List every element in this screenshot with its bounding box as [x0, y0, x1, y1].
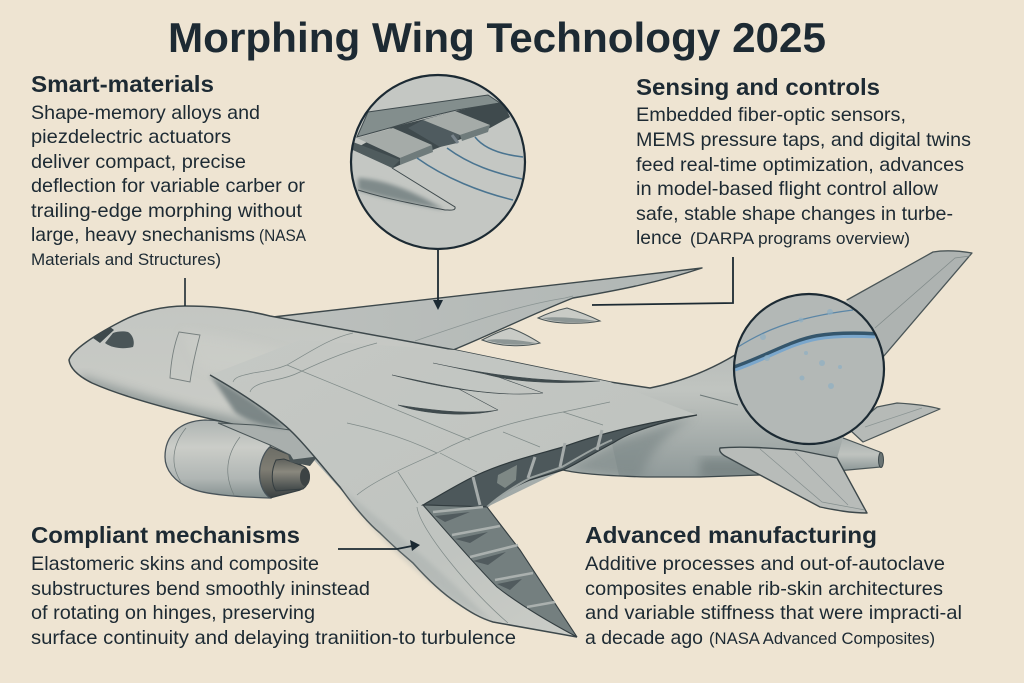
panel: smart materials [31, 71, 307, 269]
text block: compliant mechanisms: of rotating on hinges, preserving [31, 602, 315, 624]
text block: compliant mechanisms: Elastomeric skins and composite [31, 553, 319, 575]
text block: advanced manufacturing: a decade ago [585, 627, 703, 649]
text block: compliant mechanisms: substructures bend smoothly ininstead [31, 578, 370, 600]
heading: compliant mechanisms: Compliant mechanisms [31, 522, 300, 548]
fuselage and inner wing [68, 300, 850, 506]
wing panel lines [233, 333, 610, 623]
text block: advanced manufacturing [585, 553, 962, 649]
text block: smart materials: deliver compact, precise [31, 151, 246, 173]
exposed wing structure [423, 415, 697, 637]
engine pylon [218, 423, 317, 466]
panel: sensing and controls [636, 74, 971, 249]
sensor spots [760, 309, 842, 389]
inset: trailing-edge detail [350, 74, 526, 250]
wing root shadow [210, 375, 293, 433]
text block: advanced manufacturing: Additive processes and out-of-autoclave [585, 553, 945, 575]
fuselage door [170, 332, 200, 382]
leader line: sensing and controls [592, 257, 733, 305]
text block: smart materials: piezdelectric actuators [31, 126, 231, 148]
text block: smart materials [31, 102, 307, 269]
upper rib bay [423, 415, 697, 507]
far stabilizer [850, 403, 940, 442]
far wing [273, 268, 702, 350]
text block: sensing and controls: feed real-time optimization, advances [636, 154, 964, 176]
leader line: smart materials [184, 278, 186, 306]
arrow: compliant mechanisms [338, 540, 420, 551]
text block: sensing and controls: Embedded fiber-optic sensors, [636, 104, 906, 126]
text block: compliant mechanisms [31, 553, 516, 649]
aircraft illustration [69, 251, 972, 637]
text block: advanced manufacturing: composites enable rib-skin architectures [585, 578, 943, 600]
panel: advanced manufacturing [585, 522, 962, 649]
text block: smart materials: (NASA [259, 226, 307, 245]
text block: advanced manufacturing: (NASA Advanced Composites) [709, 629, 935, 648]
text block: compliant mechanisms: surface continuity and delaying traniition-to turbulence [31, 627, 516, 649]
text block: advanced manufacturing: and variable stiffness that were impracti-al [585, 602, 962, 624]
engine nozzle [258, 446, 310, 498]
heading: smart materials: Smart-materials [31, 71, 214, 97]
title: Morphing Wing Technology 2025 [168, 14, 826, 61]
text block: smart materials: deflection for variable carber or [31, 175, 306, 197]
panel: compliant mechanisms [31, 522, 516, 649]
heading: advanced manufacturing: Advanced manufacturing [585, 522, 877, 548]
text block: sensing and controls: in model-based flight control allow [636, 178, 939, 200]
text block: sensing and controls [636, 104, 971, 249]
near wing [210, 333, 697, 637]
wing surface slots [392, 363, 600, 414]
text block: sensing and controls: safe, stable shape changes in turbe- [636, 203, 953, 225]
inset: fiber-optic sensor detail [730, 290, 890, 450]
text block: smart materials: Materials and Structures) [31, 250, 221, 269]
text block: smart materials: trailing-edge morphing without [31, 200, 303, 222]
near stabilizer [720, 447, 867, 513]
tail cone [800, 438, 884, 471]
text block: smart materials: Shape-memory alloys and [31, 102, 260, 124]
text block: sensing and controls: (DARPA programs overview) [690, 229, 910, 248]
heading: sensing and controls: Sensing and controls [636, 74, 880, 100]
engine [165, 420, 310, 498]
text block: sensing and controls: MEMS pressure taps, and digital twins [636, 129, 971, 151]
cockpit windows [93, 327, 134, 348]
lower rib bay [423, 505, 577, 637]
text block: sensing and controls: lence [636, 227, 682, 249]
engine nacelle [165, 420, 271, 498]
text block: smart materials: large, heavy snechanisms [31, 224, 255, 246]
arrow: inset to far wing [433, 250, 443, 310]
vertical fin [840, 251, 972, 380]
